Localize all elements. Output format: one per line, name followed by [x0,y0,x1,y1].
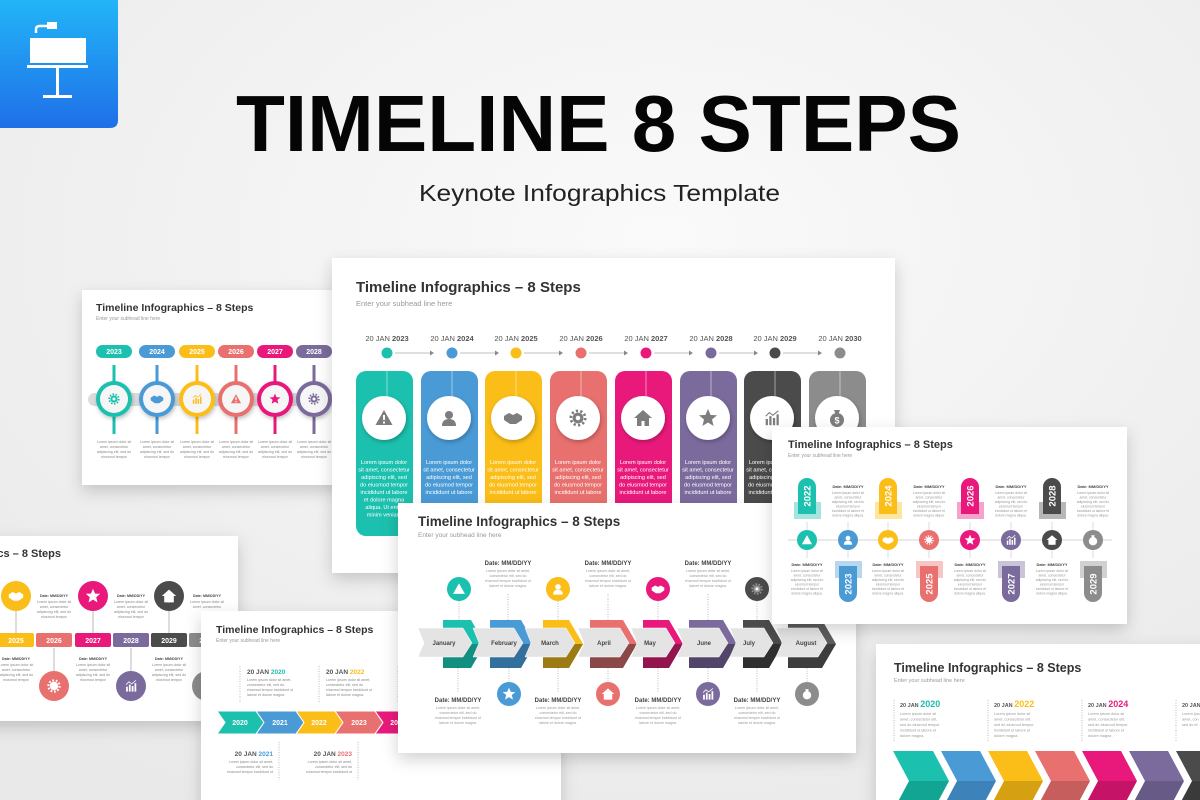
panel: slide vertical year tabs (right): Lorem ipsum dolor sit [913,491,945,495]
panel: slide arrow band (bottom): eiusmod tempor incididunt ut [247,688,293,692]
panel: slide vertical year tabs (right): amet, consectetur [916,496,943,500]
panel: slide circles timeline (top-left): eiusmod tempor [223,455,250,459]
panel: slide circles timeline (top-left): amet, consectetur [261,445,290,449]
panel: slide circles timeline (top-left): adipiscing elit, sed do [297,450,331,454]
panel: slide colored cards (center top): adipiscing elit, sed [426,475,472,481]
panel: slide vertical year tabs (right): incididunt ut labore et [995,509,1027,513]
panel: slide chevron months (center): Date: MM/DD/YY [685,561,731,567]
panel: slide year bars (bottom-left): 2030 [199,638,215,645]
panel: slide vertical year tabs (right): Lorem ipsum dolor sit [791,569,823,573]
panel: slide year bars (bottom-left): Date: MM/DD/YY [40,594,69,598]
panel: slide colored cards (center top): incididunt ut labore [426,490,472,496]
panel: slide chevron months (center): eiusmod tempor incididunt ut [535,716,581,720]
panel: slide circles timeline (top-left): 2028 [306,349,322,356]
panel: slide vertical year tabs (right): Enter your subhead line here [788,453,852,459]
panel: slide colored cards (center top): Enter your subhead line here [356,299,452,308]
panel: slide chevron months (center): March [541,641,559,647]
panel: slide colored cards (center top): do eiusmod tempor [489,482,537,488]
panel: slide vertical year tabs (right): dolore magna aliqua. [832,514,864,518]
panel: slide chevron months (center): Lorem ipsum dolor sit amet, [586,569,630,573]
panel: slide arrow band (bottom): consectetur elit, sed do [236,765,273,769]
panel: slide colored cards (center top): adipiscing elit, sed [620,475,666,481]
panel: slide year bars (bottom-left): adipiscing elit, sed do [37,610,71,614]
panel: slide chevron months (center): Lorem ipsum dolor sit amet, [636,706,680,710]
panel: slide year bars (bottom-left): amet, consectetur [193,605,222,609]
panel: slide vertical year tabs (right): amet, consectetur [794,574,821,578]
panel: slide vertical year tabs (right): dolore magna aliqua. [954,592,986,596]
colored chevrons [443,620,836,668]
panel: slide chevron months (center): eiusmod tempor incididunt ut [585,579,631,583]
panel: slide colored cards (center top): sit amet, consectetur [423,468,475,474]
panel: slide big chevrons (bottom-right): dolore magna . [994,734,1019,738]
panel: slide chevron months (center): Date: MM/DD/YY [734,698,780,704]
panel: slide colored cards (center top): adipiscing elit, sed [361,475,407,481]
panel: slide year bars (bottom-left): eiusmod tempor [41,615,68,619]
panel: slide arrow band (bottom): eiusmod tempor incididunt ut [227,770,273,774]
panel: slide year bars (bottom-left): adipiscing elit, sed do [152,673,186,677]
panel: slide year bars (bottom-left): Lorem ipsum dolor sit [114,600,148,604]
panel: slide big chevrons (bottom-right): amet, consectetur elit, [994,718,1031,722]
title: TIMELINE 8 STEPS [236,79,961,168]
panel: slide arrow band (bottom): labore et dolore magna. [247,693,285,697]
panel: slide vertical year tabs (right): Date: MM/DD/YY [832,484,864,489]
panel: slide colored cards (center top): sit amet, consectetur [358,468,410,474]
panel: slide year bars (bottom-left): eiusmod tempor [118,615,145,619]
panel: slide vertical year tabs (right): Lorem ipsum dolor sit [1077,491,1109,495]
panel: slide chevron months (center): eiusmod tempor incididunt ut [485,579,531,583]
panel: slide colored cards (center top): sit amet, consectetur [487,468,539,474]
panel: slide arrow band (bottom): Timeline Infographics – 8 Steps [216,624,374,636]
panel: slide chevron months (center): Date: MM/DD/YY [635,698,681,704]
panel: slide circles timeline (top-left): eiusmod tempor [144,455,171,459]
panel: slide circles timeline (top-left): eiusmod tempor [301,455,328,459]
panel: slide arrow band (bottom): labore et dolore magna. [326,693,364,697]
panel: slide vertical year tabs (right): adipiscing elit, sed do [832,500,864,504]
panel: slide vertical year tabs (right): incididunt ut labore et [1036,587,1068,591]
panel: slide vertical year tabs (right): incididunt ut labore et [1077,509,1109,513]
panel: slide year bars (bottom-left): eiusmod tempor [156,678,183,682]
panel: slide vertical year tabs (right): dolore magna aliqua. [1036,592,1068,596]
panel: slide colored cards (center top) [332,258,895,573]
panel: slide year bars (bottom-left): eiusmod tempor [80,678,107,682]
panel: slide chevron months (center): consectetur elit, sed do [690,574,726,578]
panel: slide colored cards (center top): do eiusmod tempor [554,482,602,488]
panel: slide circles timeline (top-left): adipiscing elit, sed do [140,450,174,454]
panel: slide chevron months (center): consectetur elit, sed do [490,574,526,578]
panel: slide colored cards (center top): do eiusmod tempor [684,482,732,488]
panel: slide big chevrons (bottom-right): Timeline Infographics – 8 Steps [894,661,1081,675]
panel: slide arrow band (bottom): 2025 [430,720,446,727]
panel: slide vertical year tabs (right): incididunt ut labore et [791,587,823,591]
panel: slide big chevrons (bottom-right): amet, consectetur elit, [900,718,937,722]
panel: slide vertical year tabs (right): adipiscing elit, sed do [913,500,945,504]
panel: slide arrow band (bottom): eiusmod tempor incididunt ut [326,688,372,692]
panel: slide chevron months (center): consectetur elit, sed do [440,711,476,715]
panel: slide arrow band (bottom): 2020 [232,720,248,727]
panel: slide colored cards (center top): incididunt ut labore [620,490,666,496]
panel: slide chevron months (center): Enter your subhead line here [418,532,502,539]
panel: slide chevron months (center): Lorem ipsum dolor sit amet, [735,706,779,710]
panel: slide vertical year tabs (right): incididunt ut labore et [913,509,945,513]
panel: slide colored cards (center top): incididunt ut labore [749,490,795,496]
panel: slide circles timeline (top-left) [82,290,342,485]
panel: slide colored cards (center top): do eiusmod tempor [619,482,667,488]
panel: slide circles timeline (top-left): 2024 [149,349,165,356]
panel: slide chevron months (center): February [491,641,517,647]
panel: slide chevron months (center): labore et dolore magna. [489,584,527,588]
panel: slide year bars (bottom-left): eiusmod tempor [3,678,30,682]
panel: slide chevron months (center): May [644,641,656,647]
panel: slide vertical year tabs (right): dolore magna aliqua. [995,514,1027,518]
panel: slide chevron months (center): labore et dolore magna. [738,721,776,725]
panel: slide vertical year tabs (right): 2028 [1048,485,1058,507]
panel: slide vertical year tabs (right): amet, consectetur [998,496,1025,500]
panel: slide big chevrons (bottom-right): Lorem ipsum dolor sit [900,712,937,716]
panel: slide arrow band (bottom): 2023 [351,720,367,727]
panel: slide year bars (bottom-left): 2029 [161,638,177,645]
panel: slide circles timeline (top-left): amet, consectetur [100,445,129,449]
panel: slide chevron months (center): labore et dolore magna. [589,584,627,588]
heading: slide title: Timeline Infographics – 8 Steps [356,279,581,296]
panel: slide arrow band (bottom): 2022 [311,720,327,727]
panel: slide vertical year tabs (right): eiusmod tempor [1040,582,1065,586]
panel: slide year bars (bottom-left): amet, consectetur [40,605,69,609]
panel: slide vertical year tabs (right): Date: MM/DD/YY [995,484,1027,489]
panel: slide vertical year tabs (right): dolore magna aliqua. [1077,514,1109,518]
panel: slide colored cards (center top): sit amet, consectetur [746,468,798,474]
panel: slide colored cards (center top): sit amet, consectetur [552,468,604,474]
panel: slide big chevrons (bottom-right): amet, consectetur elit, [1088,718,1125,722]
panel: slide circles timeline (top-left): amet, consectetur [183,445,212,449]
panel: slide big chevrons (bottom-right): Enter your subhead line here [894,678,965,684]
panel: slide arrow band (bottom): 2024 [390,720,406,727]
panel: slide vertical year tabs (right): eiusmod tempor [917,504,942,508]
panel: slide arrow band (bottom): Lorem ipsum dolor sit amet, [308,760,352,764]
panel: slide chevron months (center): labore et dolore magna. [639,721,677,725]
panel: slide vertical year tabs (right): incididunt ut labore et [832,509,864,513]
panel: slide vertical year tabs (right): amet, consectetur [1080,496,1107,500]
panel: slide circles timeline (top-left): Timeline Infographics – 8 Steps [96,302,254,314]
panel: slide colored cards (center top): Lorem ipsum dolor [685,460,731,466]
panel: slide vertical year tabs (right): Lorem ipsum dolor sit [1036,569,1068,573]
panel: slide colored cards (center top): Lorem ipsum dolor [749,460,795,466]
panel: slide arrow band (bottom): 20 JAN 2020 [247,669,286,676]
panel: slide colored cards (center top): Lorem ipsum dolor [426,460,472,466]
panel: slide big chevrons (bottom-right): incididunt ut labore et [900,728,937,732]
panel: slide circles timeline (top-left): Lorem ipsum dolor sit [97,440,131,444]
panel: slide arrow band (bottom): Lorem ipsum dolor sit amet, [326,678,370,682]
panel: slide chevron months (center): Date: MM/DD/YY [435,698,481,704]
panel: slide colored cards (center top): do eiusmod tempor [360,482,408,488]
panel: slide colored cards (center top): 20 JAN 2025 [494,334,538,343]
panel: slide vertical year tabs (right): adipiscing elit, sed do [995,500,1027,504]
panel: slide colored cards (center top): Lorem ipsum dolor [555,460,601,466]
panel: slide year bars (bottom-left): amet, consectetur [117,605,146,609]
panel: slide vertical year tabs (right): Date: MM/DD/YY [1077,484,1109,489]
panel: slide circles timeline (top-left): Lorem ipsum dolor sit [140,440,174,444]
panel: slide chevron months (center): August [796,641,816,647]
panel: slide year bars (bottom-left): Date: MM/DD/YY [117,594,146,598]
panel: slide chevron months (center): Lorem ipsum dolor sit amet, [436,706,480,710]
panel: slide vertical year tabs (right): adipiscing elit, sed do [1036,578,1068,582]
panel: slide big chevrons (bottom-right): sed do ei [1182,723,1198,727]
panel: slide year bars (bottom-left) [0,536,238,721]
panel: slide circles timeline (top-left): amet, consectetur [143,445,172,449]
panel: slide vertical year tabs (right): 2022 [802,485,814,507]
panel: slide year bars (bottom-left): amet, consectetur [2,668,31,672]
panel: slide vertical year tabs (right): eiusmod tempor [1081,504,1106,508]
panel: slide circles timeline (top-left): 2023 [106,349,122,356]
panel: slide big chevrons (bottom-right): 20 JAN 2020 [900,699,940,709]
panel: slide colored cards (center top): incididunt ut labore [685,490,731,496]
panel: slide big chevrons (bottom-right) [876,644,1200,800]
panel: slide vertical year tabs (right): Date: MM/DD/YY [913,484,945,489]
panel: slide year bars (bottom-left): Lorem ipsum dolor sit [190,600,224,604]
panel: slide vertical year tabs (right): amet, consectetur [875,574,902,578]
panel: slide vertical year tabs (right): Date: MM/DD/YY [1036,562,1068,567]
panel: slide circles timeline (top-left): 2025 [189,349,205,356]
panel: slide year bars (bottom-left): Lorem ipsum dolor sit [37,600,71,604]
panel: slide year bars (bottom-left): 2025 [8,638,24,645]
panel: slide year bars (bottom-left): Date: MM/DD/YY [155,657,184,661]
panel: slide vertical year tabs (right): 2024 [884,485,894,507]
panel: slide vertical year tabs (right) [772,427,1127,624]
panel: slide chevron months (center): eiusmod tempor incididunt ut [685,579,731,583]
panel: slide circles timeline (top-left): 2026 [228,349,244,356]
panel: slide colored cards (center top): 20 JAN 2027 [624,334,668,343]
panel: slide colored cards (center top): sit amet, consectetur [617,468,669,474]
panel: slide arrow band (bottom): 20 JAN 2023 [314,751,352,758]
panel: slide year bars (bottom-left): 2028 [123,638,139,645]
panel: slide chevron months (center): labore et dolore magna. [439,721,477,725]
panel: slide colored cards (center top): 20 JAN 2024 [430,334,475,343]
panel: slide vertical year tabs (right): 2029 [1088,573,1100,595]
panel: slide vertical year tabs (right): Lorem ipsum dolor sit [995,491,1027,495]
panel: slide year bars (bottom-left): Lorem ipsum dolor sit [76,663,110,667]
panel: slide circles timeline (top-left): adipiscing elit, sed do [97,450,131,454]
panel: slide colored cards (center top): sit amet, consectetur [682,468,734,474]
panel: slide colored cards (center top): adipiscing elit, sed [685,475,731,481]
panel: slide vertical year tabs (right): dolore magna aliqua. [913,514,945,518]
panel: slide chevron months (center): Lorem ipsum dolor sit amet, [686,569,730,573]
panel: slide chevron months (center) [398,503,856,753]
panel: slide big chevrons (bottom-right): dolore magna . [900,734,925,738]
panel: slide vertical year tabs (right): Timeline Infographics – 8 Steps [788,439,953,451]
panel: slide big chevrons (bottom-right): Lorem ipsum dolor sit [1088,712,1125,716]
panel: slide arrow band (bottom): 20 JAN 2022 [326,669,365,676]
panel: slide chevron months (center): consectetur elit, sed do [590,574,626,578]
panel: slide colored cards (center top): Lorem ipsum dolor [490,460,536,466]
panel: slide vertical year tabs (right): Lorem ipsum dolor sit [872,569,904,573]
panel: slide arrow band (bottom): 20 JAN 2021 [235,751,273,758]
panel: slide colored cards (center top): 20 JAN 2023 [365,334,409,343]
panel: slide colored cards (center top): 20 JAN 2026 [559,334,603,343]
panel: slide circles timeline (top-left): amet, consectetur [300,445,329,449]
panel: slide big chevrons (bottom-right): incididunt ut labore et [994,728,1031,732]
panel: slide year bars (bottom-left): adipiscing elit, sed do [76,673,110,677]
panel: slide vertical year tabs (right): eiusmod tempor [795,582,820,586]
panel: slide circles timeline (top-left): 2027 [267,349,283,356]
panel: slide vertical year tabs (right): 2027 [1006,573,1018,595]
panel: slide colored cards (center top): adipiscing elit, sed [749,475,795,481]
panel: slide chevron months (center): Date: MM/DD/YY [785,561,831,567]
panel: slide colored cards (center top): minim veniam [367,512,402,518]
panel: slide big chevrons (bottom-right): dolore magna . [1088,734,1113,738]
panel: slide circles timeline (top-left): adipiscing elit, sed do [219,450,253,454]
panel: slide arrow band (bottom): consectetur elit, sed do [247,683,284,687]
panel: slide chevron months (center): Date: MM/DD/YY [585,561,631,567]
subtitle: Keynote Infographics Template [419,180,780,206]
panel: slide year bars (bottom-left): Date: MM/DD/YY [2,657,31,661]
panel: slide arrow band (bottom): Enter your subhead line here [216,638,280,644]
panel: slide colored cards (center top): Lorem ipsum dolor [361,460,407,466]
panel: slide chevron months (center): eiusmod tempor incididunt ut [635,716,681,720]
panel: slide vertical year tabs (right): Date: MM/DD/YY [791,562,823,567]
panel: slide year bars (bottom-left): Date: MM/DD/YY [79,657,108,661]
panel: slide arrow band (bottom): eiusmod tempor incididunt ut [306,770,352,774]
panel: slide chevron months (center): April [597,641,611,647]
panel: slide colored cards (center top): incididunt ut labore [361,490,407,496]
panel: slide chevron months (center): consectetur elit, sed do [640,711,676,715]
panel: slide chevron months (center): June [697,641,712,647]
panel: slide vertical year tabs (right): eiusmod tempor [958,582,983,586]
panel: slide arrow band (bottom): consectetur elit, sed do [326,683,363,687]
panel: slide circles timeline (top-left): Lorem ipsum dolor sit [297,440,331,444]
panel: slide colored cards (center top): adipiscing elit, sed [490,475,536,481]
panel: slide chevron months (center): consectetur elit, sed do [540,711,576,715]
panel: slide circles timeline (top-left): Lorem ipsum dolor sit [180,440,214,444]
panel: slide colored cards (center top): adipiscing elit, sed [555,475,601,481]
panel: slide vertical year tabs (right): dolore magna aliqua. [872,592,904,596]
panel: slide vertical year tabs (right): adipiscing elit, sed do [791,578,823,582]
panel: slide chevron months (center): labore et dolore magna. [539,721,577,725]
panel: slide colored cards (center top): incididunt ut labore [555,490,601,496]
panel: slide vertical year tabs (right): Lorem ipsum dolor sit [954,569,986,573]
panel: slide arrow band (bottom): consectetur elit, sed do [315,765,352,769]
panel: slide arrow band (bottom): Lorem ipsum dolor sit amet, [247,678,291,682]
panel: slide colored cards (center top): 20 JAN 2029 [753,334,797,343]
panel: slide vertical year tabs (right): 2025 [924,573,936,595]
panel: slide circles timeline (top-left): adipiscing elit, sed do [258,450,292,454]
panel: slide chevron months (center): eiusmod tempor incididunt ut [734,716,780,720]
panel: slide chevron months (center): Lorem ipsum dolor sit amet, [536,706,580,710]
panel: slide vertical year tabs (right): eiusmod tempor [999,504,1024,508]
panel: slide colored cards (center top): do eiusmod tempor [748,482,796,488]
panel: slide vertical year tabs (right): adipiscing elit, sed do [1077,500,1109,504]
panel: slide big chevrons (bottom-right): 20 JAN 2024 [1088,699,1128,709]
panel: slide year bars (bottom-left): Date: MM/DD/YY [193,594,222,598]
panel: slide colored cards (center top): aliqua. Ut enim [365,505,403,511]
icon: keynote app [0,0,118,128]
panel: slide chevron months (center): Date: MM/DD/YY [535,698,581,704]
panel: slide year bars (bottom-left): amet, consectetur [79,668,108,672]
panel: slide chevron months (center): Date: MM/DD/YY [485,561,531,567]
panel: slide circles timeline (top-left): eiusmod tempor [262,455,289,459]
panel: slide big chevrons (bottom-right): sed do eiusmod tempor [994,723,1034,727]
panel: slide year bars (bottom-left): 2026 [46,638,62,645]
panel: slide circles timeline (top-left): adipiscing elit, sed do [180,450,214,454]
panel: slide big chevrons (bottom-right): 20 JAN 2022 [994,699,1034,709]
panel: slide vertical year tabs (right): Date: MM/DD/YY [872,562,904,567]
panel: slide circles timeline (top-left): Lorem ipsum dolor sit [219,440,253,444]
panel: slide chevron months (center): Lorem ipsum dolor sit amet, [486,569,530,573]
panel: slide chevron months (center): consectetur elit, sed do [739,711,775,715]
panel: slide arrow band (bottom): Lorem ipsum dolor sit amet, [229,760,273,764]
panel: slide circles timeline (top-left): Enter your subhead line here [96,316,160,322]
panel: slide circles timeline (top-left): amet, consectetur [222,445,251,449]
panel: slide arrow band (bottom): 2026 [469,720,485,727]
panel: slide big chevrons (bottom-right): sed do eiusmod tempor [1088,723,1128,727]
panel: slide chevron months (center): Timeline Infographics – 8 Steps [418,514,620,529]
panel: slide colored cards (center top): 20 JAN 2030 [818,334,862,343]
panel: slide vertical year tabs (right): incididunt ut labore et [872,587,904,591]
panel: slide chevron months (center): labore et dolore magna. [689,584,727,588]
panel: slide vertical year tabs (right): Lorem ipsum dolor sit [832,491,864,495]
panel: slide vertical year tabs (right): amet, consectetur [1039,574,1066,578]
panel: slide vertical year tabs (right): amet, consectetur [835,496,862,500]
panel: slide vertical year tabs (right): eiusmod tempor [876,582,901,586]
panel: slide vertical year tabs (right): dolore magna aliqua. [791,592,823,596]
panel: slide colored cards (center top): 20 JAN 2028 [689,334,733,343]
panel: slide big chevrons (bottom-right): Lorem ipsum dolor sit [994,712,1031,716]
panel: slide vertical year tabs (right): eiusmod tempor [836,504,861,508]
panel: slide colored cards (center top): et dolore magna [364,498,405,504]
panel: slide vertical year tabs (right): 2026 [966,485,976,507]
panel: slide chevron months (center): January [432,641,456,647]
panel: slide big chevrons (bottom-right): incididunt ut labore et [1088,728,1125,732]
panel: slide vertical year tabs (right): adipiscing elit, sed do [872,578,904,582]
panel: slide year bars (bottom-left): 2027 [85,638,101,645]
panel: slide colored cards (center top): Lorem ipsum dolor [620,460,666,466]
panel: slide circles timeline (top-left): Lorem ipsum dolor sit [258,440,292,444]
panel: slide arrow band (bottom): 2021 [272,720,288,727]
panel: slide vertical year tabs (right): 2023 [844,573,854,595]
panel: slide big chevrons (bottom-right): amet, con [1182,718,1199,722]
panel: slide vertical year tabs (right): amet, consectetur [957,574,984,578]
panel: slide circles timeline (top-left): eiusmod tempor [184,455,211,459]
panel: slide chevron months (center): July [743,641,756,647]
panel: slide vertical year tabs (right): adipiscing elit, sed do [954,578,986,582]
panel: slide circles timeline (top-left): eiusmod tempor [101,455,128,459]
panel: slide arrow band (bottom) [201,611,561,800]
panel: slide year bars (bottom-left): amet, consectetur [155,668,184,672]
panel: slide big chevrons (bottom-right): sed do eiusmod tempor [900,723,940,727]
panel: slide colored cards (center top): do eiusmod tempor [425,482,473,488]
panel: slide year bars (bottom-left): Lorem ipsum dolor sit [152,663,186,667]
panel: slide vertical year tabs (right): incididunt ut labore et [954,587,986,591]
panel: slide colored cards (center top): incididunt ut labore [490,490,536,496]
panel: slide vertical year tabs (right): Date: MM/DD/YY [954,562,986,567]
panel: slide chevron months (center): eiusmod tempor incididunt ut [435,716,481,720]
panel: slide arrow band (bottom): 2027 [509,720,525,727]
panel: slide year bars (bottom-left): adipiscing elit, sed do [114,610,148,614]
